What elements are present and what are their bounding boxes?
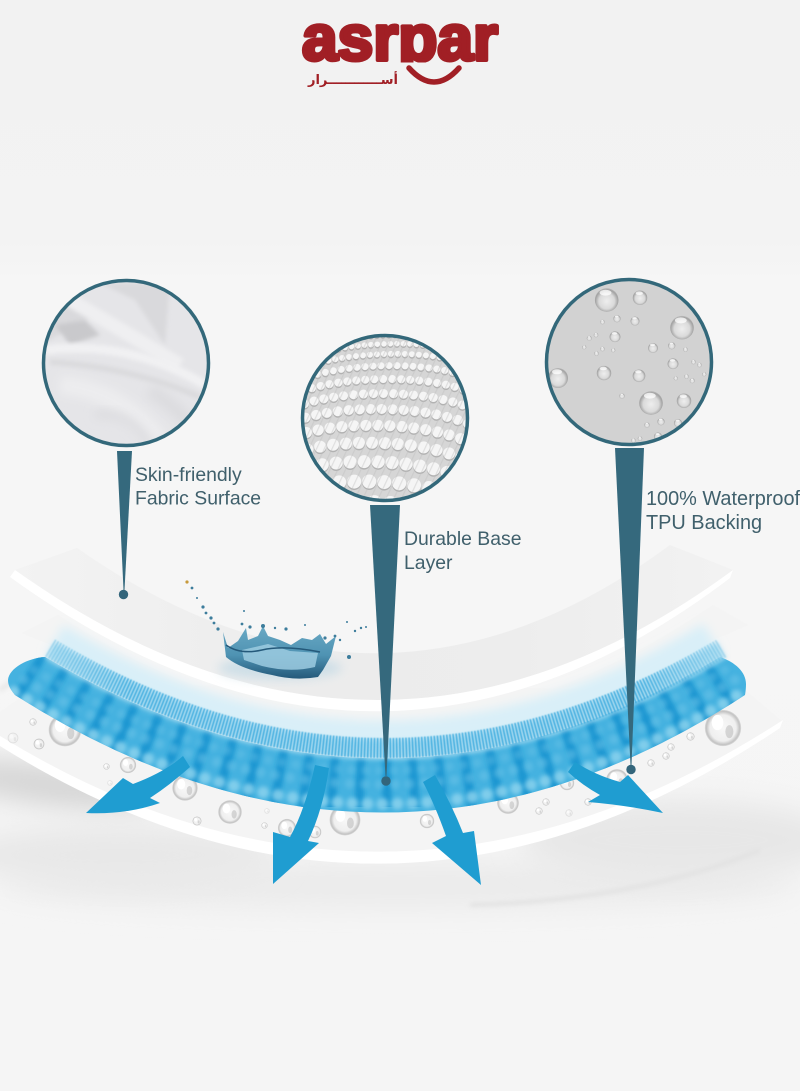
arrow: far right bbox=[568, 762, 663, 813]
label: TPU Backing bbox=[646, 512, 762, 534]
logo wordmark: asrpar bbox=[302, 2, 498, 74]
callout: waterproof backing bbox=[544, 277, 800, 774]
logo bbox=[302, 23, 499, 88]
water ripples ground bbox=[0, 660, 800, 909]
label: 100% Waterproof bbox=[646, 488, 800, 510]
layer: top fabric sheet bbox=[10, 545, 733, 711]
label: Skin-friendly bbox=[135, 464, 242, 486]
pointer dot bbox=[119, 590, 128, 599]
layer: blue absorbent foam bbox=[8, 657, 746, 812]
label: Layer bbox=[404, 552, 453, 574]
splash droplets bbox=[185, 580, 367, 659]
droplets swatch circle bbox=[544, 277, 714, 447]
pointer dot bbox=[626, 765, 636, 774]
water splash bbox=[185, 580, 367, 680]
label: Fabric Surface bbox=[135, 488, 261, 510]
splash highlights bbox=[242, 644, 318, 670]
pointer pin bbox=[615, 448, 644, 765]
pointer pin bbox=[370, 505, 400, 776]
arrow: centre right bbox=[423, 775, 481, 885]
pointer pin bbox=[117, 451, 132, 590]
splash shadow bbox=[218, 656, 342, 680]
logo arabic name: أســــــــــــرار bbox=[307, 71, 398, 88]
callout: durable base layer bbox=[295, 333, 522, 786]
callout: skin-friendly fabric bbox=[40, 278, 261, 599]
arrow: far left bbox=[86, 756, 190, 813]
layer: blue mesh bbox=[22, 605, 748, 750]
label: Durable Base bbox=[404, 528, 522, 550]
pointer dot bbox=[381, 776, 391, 786]
splash crown strokes bbox=[226, 645, 320, 652]
knit swatch circle bbox=[300, 334, 470, 502]
bubbles under the foam bbox=[8, 710, 741, 838]
layer: backing sheet bbox=[0, 684, 783, 864]
arrow: centre left bbox=[273, 765, 329, 884]
splash body bbox=[223, 626, 336, 679]
fabric swatch circle bbox=[40, 278, 212, 450]
logo smile bbox=[409, 68, 459, 82]
